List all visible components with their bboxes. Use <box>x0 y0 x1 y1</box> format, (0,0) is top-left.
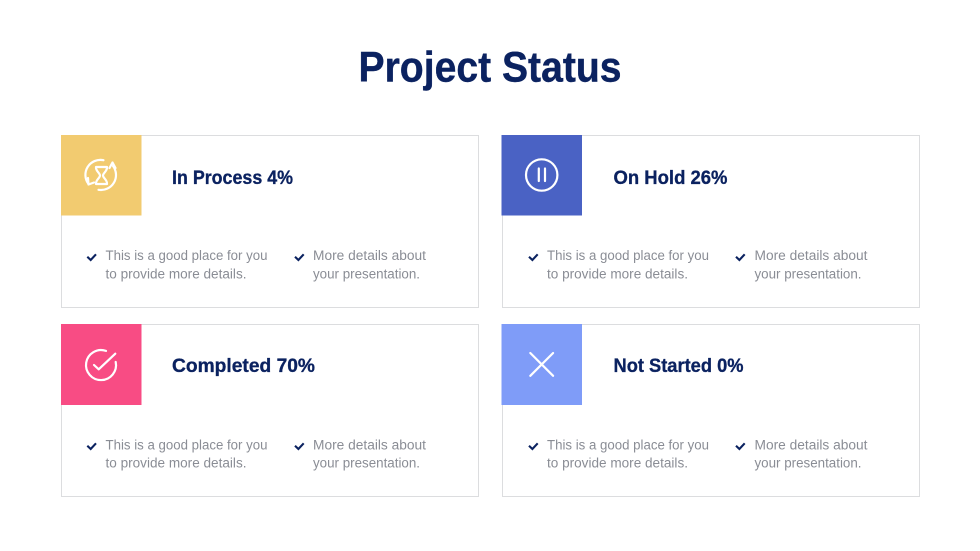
heading: On Hold 26% <box>614 167 728 189</box>
icon: check circle <box>61 324 142 405</box>
checklist item 2: your presentation. <box>754 266 862 282</box>
checklist item 1: to provide more details. <box>106 456 246 470</box>
checklist item 2 <box>736 248 868 282</box>
checklist item 1: to provide more details. <box>547 456 688 470</box>
checklist item 2: More details about <box>754 438 868 452</box>
checklist item 1 <box>87 438 268 470</box>
heading: In Process 4% <box>172 167 293 189</box>
checklist item 1: This is a good place for you <box>547 248 709 263</box>
checklist item 2: More details about <box>313 248 426 263</box>
panel: completed <box>61 324 478 496</box>
heading: Not Started 0% <box>614 355 744 377</box>
icon: hourglass with arrows <box>61 135 142 216</box>
checklist item 2: your presentation. <box>313 266 420 282</box>
checklist item 2 <box>736 438 868 470</box>
checklist item 1: This is a good place for you <box>547 438 709 452</box>
checklist item 2: your presentation. <box>313 456 420 470</box>
checklist item 2 <box>295 438 426 470</box>
checklist item 2: More details about <box>754 248 868 263</box>
panel: not started <box>502 324 920 496</box>
checklist item 2 <box>295 248 426 282</box>
title: Project Status <box>358 44 622 92</box>
checklist item 1 <box>87 248 268 282</box>
icon: cross <box>502 324 582 405</box>
checklist item 1 <box>529 438 709 470</box>
panel: in process <box>61 135 478 308</box>
heading: Completed 70% <box>172 355 315 377</box>
checklist item 2: More details about <box>313 438 426 452</box>
checklist item 1 <box>529 248 709 282</box>
checklist item 1: to provide more details. <box>106 266 246 282</box>
checklist item 1: to provide more details. <box>547 266 688 282</box>
checklist item 1: This is a good place for you <box>106 438 268 452</box>
panel: on hold <box>502 135 920 308</box>
checklist item 1: This is a good place for you <box>106 248 268 263</box>
icon: pause <box>502 135 582 216</box>
checklist item 2: your presentation. <box>754 456 862 470</box>
